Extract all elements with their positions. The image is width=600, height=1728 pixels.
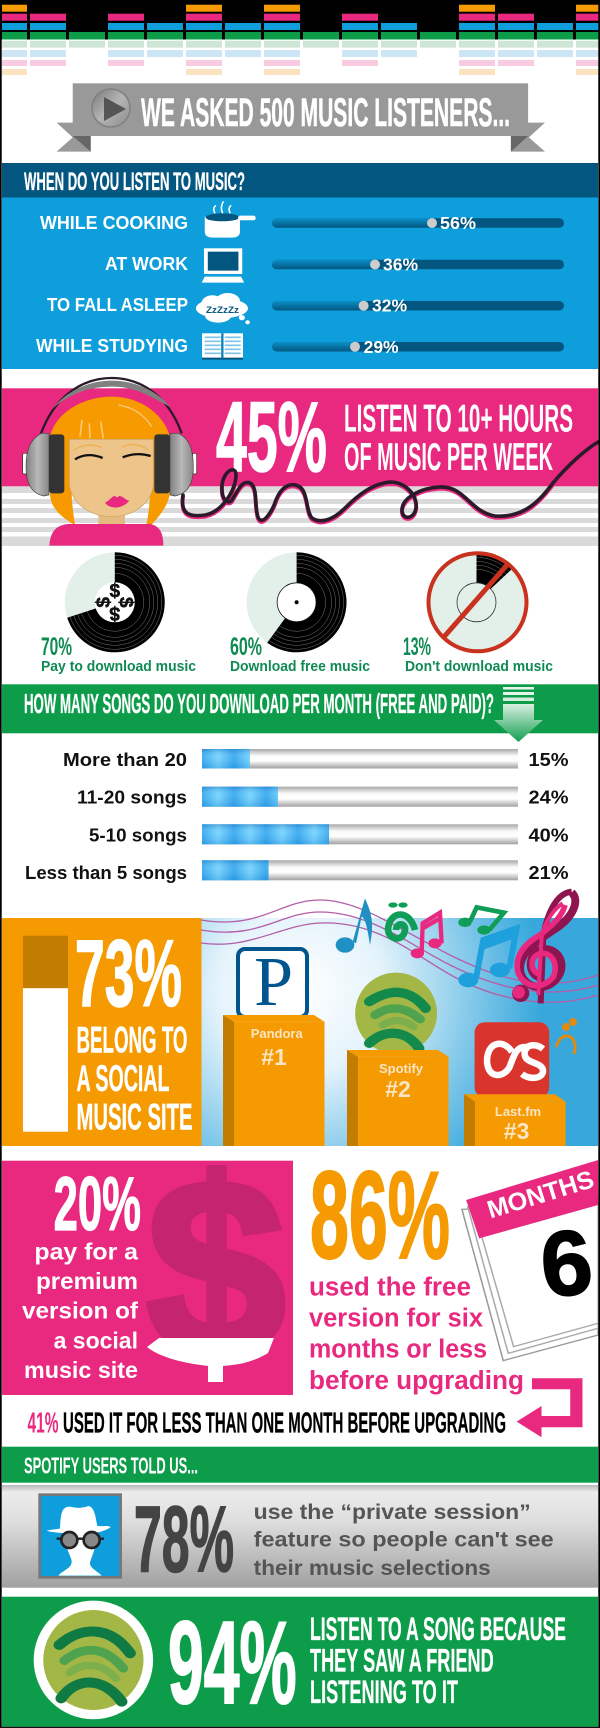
- podium: last.fm: [464, 1094, 566, 1146]
- icon: laptop: [202, 248, 244, 283]
- row: at work: [105, 254, 564, 274]
- icon: dollar signs label: $: [115, 597, 136, 608]
- panel: spotify users heading: [2, 1447, 598, 1483]
- icon: thought cloud: ZzZzZz: [206, 305, 239, 316]
- text: pay for a premium: pay for a: [34, 1238, 138, 1264]
- banner ribbon: [57, 83, 545, 152]
- text: used the free version: months or less: [309, 1336, 487, 1364]
- podium: spotify: #2: [385, 1076, 411, 1102]
- stat: 13%: 13%: [403, 633, 431, 661]
- row: while cooking: [40, 213, 564, 233]
- icon: calendar six months: MONTHS: [484, 1165, 597, 1224]
- panel: private session: [2, 1485, 598, 1592]
- text: pay for a premium: music site: [24, 1357, 138, 1383]
- row: less than 5 songs: [25, 860, 568, 883]
- row: 5-10 songs: [89, 824, 568, 845]
- text: used the free version: [309, 1274, 524, 1395]
- row: 5-10 songs: 5-10 songs: [89, 825, 187, 845]
- icon: thought cloud: [196, 293, 250, 324]
- panel: spotify users heading: SPOTIFY USERS TOLD US...: [24, 1452, 198, 1478]
- row: more than 20: 15%: [528, 750, 568, 770]
- stat: 94%: 94%: [168, 1597, 297, 1728]
- icon: cooking pot: [205, 201, 256, 238]
- callout: 41 percent: 41%: [28, 1408, 59, 1440]
- text: used the free version: version for six: [309, 1305, 483, 1333]
- row: 5-10 songs: 40%: [528, 825, 568, 845]
- icon: play button: [92, 89, 130, 127]
- stat: 86%: 86%: [310, 1147, 450, 1285]
- row: more than 20: [63, 749, 568, 770]
- text: a social: A SOCIAL: [76, 1058, 170, 1099]
- podium: pandora: #1: [261, 1044, 287, 1070]
- text: private session feature: [254, 1500, 554, 1580]
- text: belong to: BELONG TO: [76, 1020, 188, 1061]
- row: while studying: 29%: [364, 337, 399, 357]
- illustration: girl with headphones: [23, 378, 197, 546]
- text: private session feature: their music selections: [254, 1556, 491, 1580]
- row: at work: AT WORK: [105, 254, 188, 274]
- icon: dollar signs label: [94, 581, 136, 624]
- text: used the free version: before upgrading: [309, 1367, 524, 1395]
- icon: big dollar sign: $: [146, 1128, 286, 1407]
- icon: red prohibition sign: [428, 553, 526, 651]
- panel: social music sites podium: [201, 892, 598, 1146]
- label: pay to download: Pay to download music: [41, 659, 196, 675]
- row: to fall asleep: [47, 295, 564, 316]
- panel: 73 percent social: [2, 918, 202, 1146]
- text: pay for a premium: [22, 1238, 138, 1383]
- stat: 20%: 20%: [54, 1162, 141, 1247]
- stat: 73%: 73%: [75, 921, 182, 1027]
- podium: last.fm: Last.fm: [495, 1104, 541, 1119]
- chart: vinyl 13 percent: [403, 553, 553, 675]
- icon: open book: [202, 333, 243, 360]
- text: private session feature: feature so people can't see: [254, 1528, 554, 1552]
- chart: vinyl 70 percent: [41, 552, 196, 675]
- label: download free: Download free music: [230, 659, 370, 675]
- text: pay for a premium: premium: [36, 1268, 138, 1294]
- headphone cable: [182, 442, 598, 522]
- row: 11-20 songs: [77, 787, 568, 808]
- text: pay for a premium: a social: [54, 1327, 138, 1353]
- icon: small orange figure: [556, 1020, 576, 1054]
- stat: 70%: 70%: [41, 633, 72, 661]
- icon: incognito figure: [40, 1495, 121, 1577]
- title banner: [57, 83, 545, 152]
- arrow: return arrow: [517, 1378, 582, 1437]
- callout: 41 percent: [28, 1378, 582, 1440]
- podium: pandora: [223, 1015, 324, 1146]
- icon: pandora logo: P: [254, 944, 293, 1021]
- icon: treble clef: [512, 892, 575, 1003]
- icon: dollar signs label: $: [110, 581, 121, 602]
- chart: vinyl 60 percent: [230, 552, 370, 675]
- bar chart: songs per month: [25, 749, 568, 883]
- panel: 86 percent free version: [309, 1147, 598, 1395]
- chart: 73 percent bar: [23, 936, 68, 1132]
- row: to fall asleep: 32%: [372, 296, 407, 316]
- podium: last.fm: #3: [504, 1118, 529, 1144]
- panel: when do you listen: [2, 163, 598, 369]
- label: don't download: Don't download music: [405, 659, 553, 675]
- text: music site: MUSIC SITE: [76, 1096, 192, 1137]
- icon: music notes: [336, 898, 517, 987]
- text: used the free version: used the free: [309, 1274, 471, 1302]
- row: more than 20: More than 20: [63, 750, 187, 770]
- row: while studying: [36, 336, 564, 357]
- row: at work: 36%: [383, 254, 418, 274]
- row: less than 5 songs: Less than 5 songs: [25, 863, 187, 883]
- equalizer header: [0, 0, 600, 75]
- row: while cooking: WHILE COOKING: [40, 213, 188, 233]
- text: listen to a song: [310, 1611, 566, 1710]
- icon: spotify logo large: [34, 1601, 153, 1719]
- icon: dollar signs label: $: [109, 603, 120, 624]
- stat: 60%: 60%: [230, 633, 262, 661]
- stat: 78%: 78%: [134, 1487, 234, 1592]
- row: to fall asleep: TO FALL ASLEEP: [47, 295, 188, 315]
- heading: when do you listen: WHEN DO YOU LISTEN TO MUSIC?: [24, 168, 245, 196]
- panel: songs per month heading: [2, 684, 598, 742]
- podium: spotify: [347, 1050, 448, 1146]
- text: listen to a song: LISTENING TO IT: [310, 1674, 458, 1710]
- text: pay for a premium: version of: [22, 1297, 138, 1323]
- panel: 45 percent listen: [2, 378, 598, 546]
- staff lines: [201, 900, 598, 1002]
- icon: dollar signs label: $: [94, 597, 115, 608]
- icon: last.fm logo: [475, 1022, 549, 1097]
- podium: pandora: Pandora: [251, 1026, 303, 1041]
- row: while studying: WHILE STUDYING: [36, 336, 188, 356]
- text: private session feature: use the “private session”: [254, 1500, 531, 1524]
- row: 11-20 songs: 24%: [528, 788, 568, 808]
- row: less than 5 songs: 21%: [528, 863, 568, 883]
- row: while cooking: 56%: [440, 213, 476, 233]
- panel: 20 percent premium: [2, 1160, 293, 1395]
- icon: calendar six months: 6: [536, 1211, 597, 1317]
- panel: 94 percent friend: [0, 1597, 600, 1728]
- row: 11-20 songs: 11-20 songs: [77, 788, 187, 808]
- stat: 45%: 45%: [216, 381, 327, 492]
- icon: download arrow: [494, 687, 543, 742]
- icon: pandora logo: [238, 944, 307, 1021]
- icon: spotify logo small: [355, 973, 437, 1054]
- icon: calendar six months: [462, 1160, 598, 1361]
- podium: spotify: Spotify: [379, 1061, 424, 1076]
